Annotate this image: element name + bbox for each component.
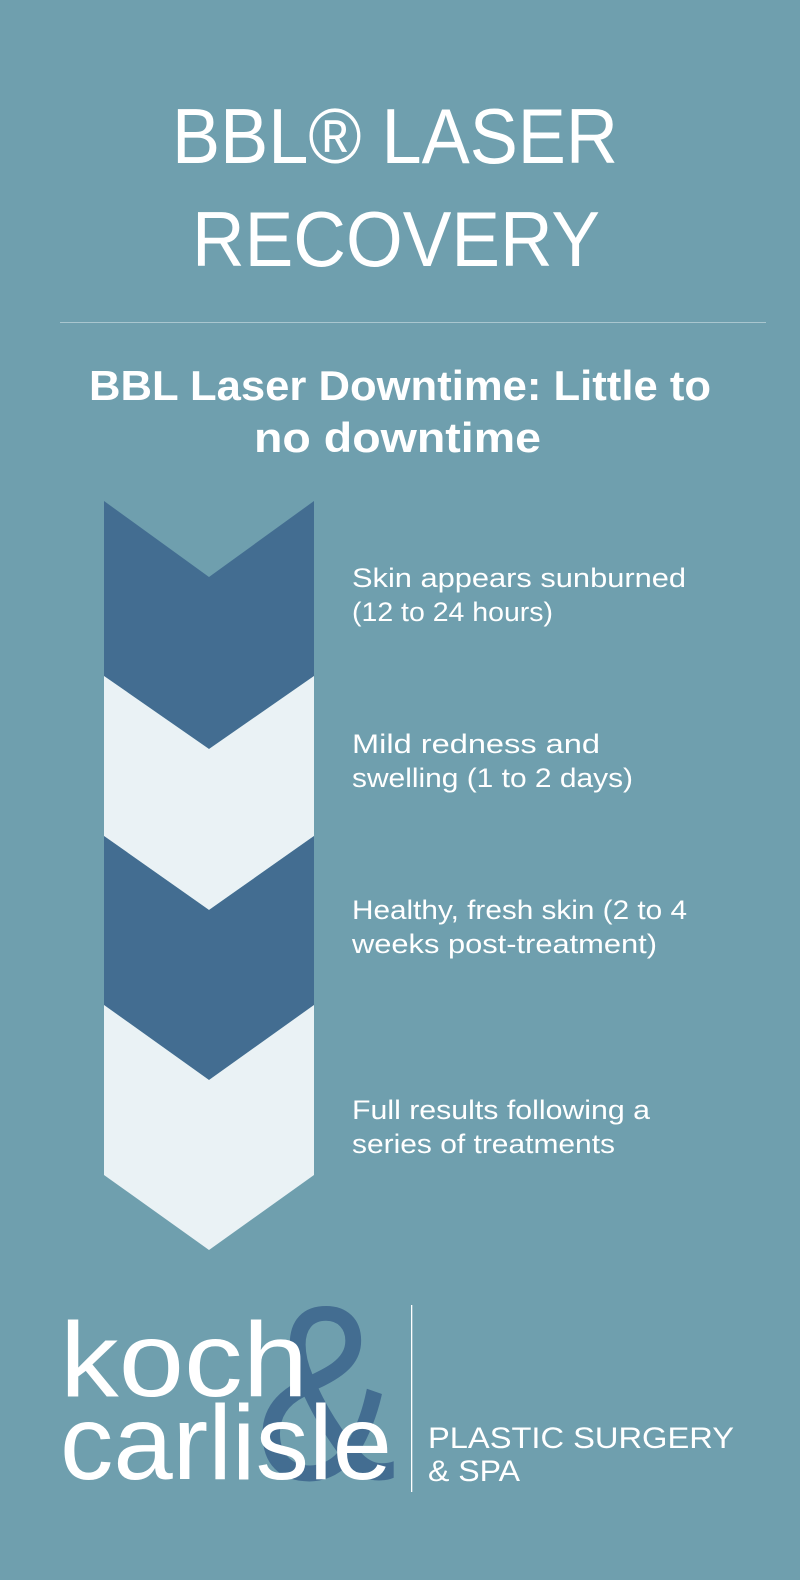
logo: carlisle: [60, 1384, 392, 1502]
title: [172, 92, 618, 280]
step 2 text: Mild redness and: [352, 729, 600, 759]
step texts: [351, 563, 687, 1159]
step 4 text: [352, 1095, 651, 1159]
step 3 text: weeks post-treatment): [351, 929, 657, 959]
step 2 text: swelling (1 to 2 days): [352, 763, 633, 793]
step 2 text: [352, 729, 633, 793]
step 4 text: Full results following a: [352, 1095, 651, 1125]
logo: koch: [60, 1301, 308, 1419]
subtitle: no downtime: [254, 414, 541, 461]
logo: [60, 1280, 734, 1520]
logo: & SPA: [428, 1455, 520, 1488]
subtitle: BBL Laser Downtime: Little to: [89, 362, 711, 409]
step 1 text: (12 to 24 hours): [352, 597, 553, 627]
step 3 text: Healthy, fresh skin (2 to 4: [352, 895, 687, 925]
logo: PLASTIC SURGERY: [428, 1422, 734, 1455]
step 4 text: series of treatments: [352, 1129, 615, 1159]
subtitle: [89, 362, 711, 461]
step 1 text: Skin appears sunburned: [352, 563, 686, 593]
title: BBL® LASER: [172, 92, 618, 180]
step 3 text: [351, 895, 687, 959]
step 1 text: [352, 563, 686, 627]
